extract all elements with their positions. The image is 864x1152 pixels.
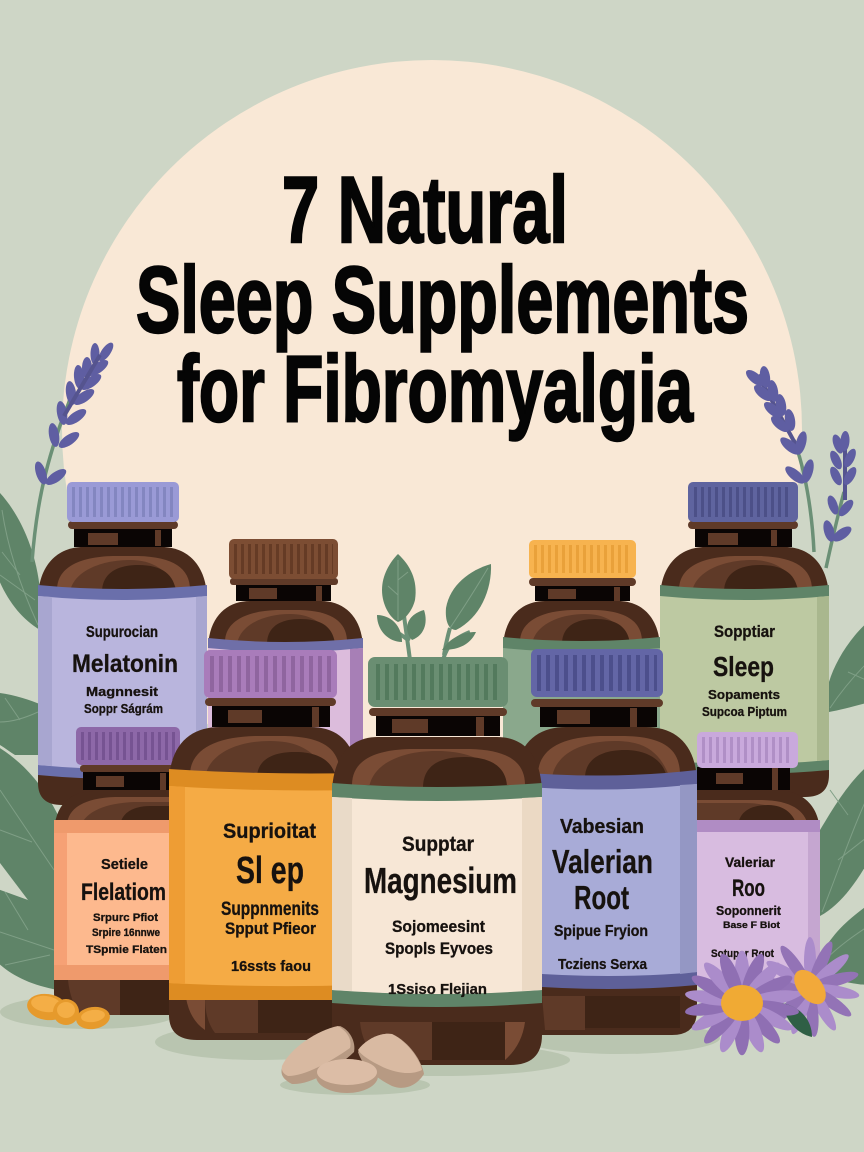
bottle: sleep sage back right: Sleep xyxy=(713,651,774,682)
right leaves xyxy=(820,620,864,985)
bottle: melatonin back left: Melatonin xyxy=(72,650,178,678)
bottle: lilac valerian root small: Sotuper Rgot xyxy=(711,948,774,960)
flower leaf xyxy=(782,1003,812,1037)
bottle: valerian root: Valerian xyxy=(552,843,653,880)
bottle: peach flelatiom: TSpmie Flaten xyxy=(86,944,167,956)
bottle: valerian root: Vabesian xyxy=(560,816,644,838)
beige tablets xyxy=(281,1026,424,1093)
bottle: lilac valerian root small: Base F Biot xyxy=(723,920,780,930)
bottle: peach flelatiom: Srpire 16nnwe xyxy=(92,927,160,939)
left leaves xyxy=(0,493,58,990)
bottle: orange sleep: Suppnmenits xyxy=(221,899,319,920)
sun circle backdrop xyxy=(62,60,802,800)
bottle: valerian root xyxy=(515,649,697,1035)
bottle: magnesium center xyxy=(332,657,542,1065)
bottle: magnesium center: Sojomeesint xyxy=(392,917,485,936)
bottle: valerian root: Spipue Fryion xyxy=(554,923,648,940)
bottle: melatonin back left xyxy=(38,482,207,805)
bottle: brown cap back xyxy=(208,539,363,780)
bottle: sleep sage back right: Supcoa Piptum xyxy=(702,704,787,719)
bottle: lilac valerian root small: Roo xyxy=(732,875,765,902)
bottle: lilac valerian root small: Valeriar xyxy=(725,854,776,870)
title xyxy=(136,157,749,441)
bottle: lilac valerian root small: Soponnerit xyxy=(716,903,782,918)
ground shadows xyxy=(0,995,720,1095)
bottle: orange sleep: Suprioitat xyxy=(223,820,316,843)
bottle: yellow cap back xyxy=(503,540,660,780)
front daisy flower xyxy=(684,951,800,1055)
bottle: sleep sage back right: Sopaments xyxy=(708,687,780,702)
bottle: magnesium center: Magnesium xyxy=(364,860,517,901)
bottle: peach flelatiom xyxy=(54,727,180,1015)
bottle: melatonin back left: Magnnesit xyxy=(86,684,159,699)
back daisy flower xyxy=(760,937,860,1037)
bottle: melatonin back left: Supurocian xyxy=(86,624,158,641)
bottle: peach flelatiom: Flelatiom xyxy=(81,879,166,906)
right lavender sprigs xyxy=(743,365,859,568)
bottle: magnesium center: Supptar xyxy=(402,833,474,856)
bottle: orange sleep xyxy=(169,650,358,1040)
bottle: melatonin back left: Soppr Ságrám xyxy=(84,701,163,716)
bottle: orange sleep: 16ssts faou xyxy=(231,958,311,975)
bottle: lilac valerian root small xyxy=(697,732,820,985)
bottle: sleep sage back right: Sopptiar xyxy=(714,622,775,641)
title: 7 Natural xyxy=(282,157,568,262)
bottle: orange sleep: Spput Pfieor xyxy=(225,919,316,938)
bottle: peach flelatiom: Setiele xyxy=(101,856,148,873)
bottle: valerian root: Root xyxy=(574,879,629,916)
left lavender sprig xyxy=(32,340,116,562)
orange softgel capsules xyxy=(25,991,111,1031)
bottle: sleep sage back right xyxy=(660,482,829,797)
bottle: magnesium center: 1Ssiso Flejian xyxy=(388,981,487,998)
bottle: valerian root: Tcziens Serxa xyxy=(558,956,648,973)
bottle: orange sleep: Sl ep xyxy=(236,850,304,892)
green sprig behind center bottle xyxy=(377,554,491,660)
bottle: magnesium center: Spopls Eyvoes xyxy=(385,939,493,958)
bottle: peach flelatiom: Srpurc Pfiot xyxy=(93,912,158,924)
